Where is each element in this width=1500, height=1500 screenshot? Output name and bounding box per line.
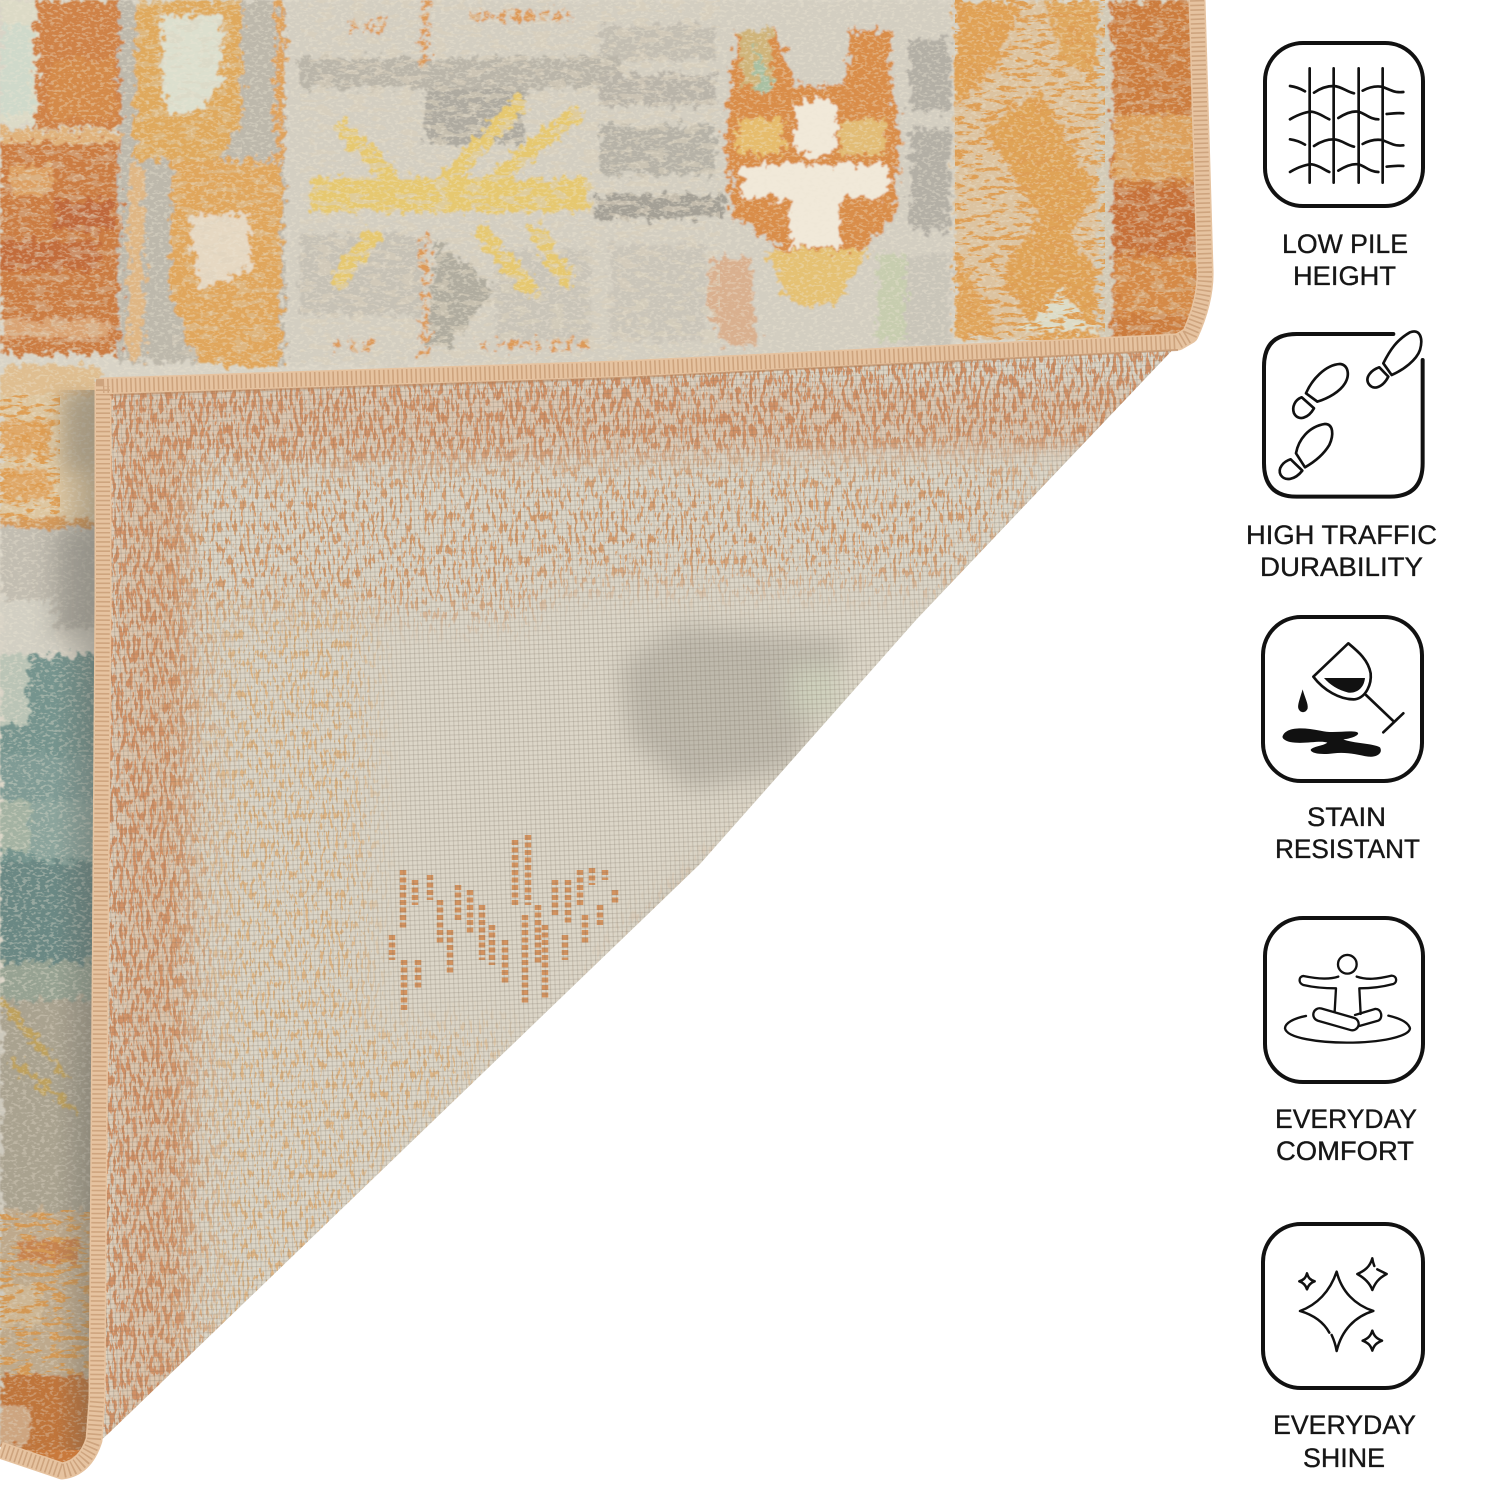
- feature: stain resistant: [1263, 617, 1422, 864]
- label: high traffic durability: [1246, 520, 1437, 582]
- hexagon border panel: [120, 0, 285, 365]
- label: high traffic durability: DURABILITY: [1260, 552, 1423, 582]
- label: everyday shine: SHINE: [1303, 1443, 1385, 1473]
- label: everyday comfort: COMFORT: [1276, 1136, 1414, 1166]
- icon: spilled wine glass: [1263, 617, 1422, 781]
- label: stain resistant: RESISTANT: [1275, 834, 1420, 864]
- icon: footprints: [1264, 331, 1423, 497]
- woven hatch on orange border: [0, 0, 1200, 1375]
- orange back-weave speckle: [102, 351, 1171, 1439]
- central grey field: [288, 0, 953, 365]
- woven colour patches: [110, 385, 1190, 1450]
- feature: high traffic durability: [1246, 331, 1437, 582]
- label: stain resistant: STAIN: [1307, 802, 1386, 832]
- label: low pile height: LOW PILE: [1282, 229, 1408, 259]
- icon: sparkles: [1263, 1224, 1423, 1388]
- label: low pile height: [1282, 229, 1408, 291]
- patterned orange border: [955, 0, 1113, 340]
- feature: everyday comfort: [1265, 918, 1423, 1166]
- label: high traffic durability: HIGH TRAFFIC: [1246, 520, 1437, 550]
- label: everyday shine: EVERYDAY: [1273, 1410, 1416, 1440]
- feature: everyday shine: [1263, 1224, 1423, 1473]
- orange dashed axis: [335, 0, 590, 360]
- right rust border: [1112, 0, 1202, 340]
- lower-left strip of front face: [0, 365, 100, 1475]
- icon: seated person: [1265, 918, 1423, 1082]
- stitched binding along fold and edges: [0, 0, 1205, 1471]
- yellow star motif: [312, 100, 590, 295]
- label: low pile height: HEIGHT: [1293, 261, 1396, 291]
- label: everyday comfort: [1275, 1104, 1417, 1166]
- top-left rust blocks: [0, 0, 122, 354]
- label: everyday shine: [1273, 1410, 1416, 1473]
- rug back face: [102, 350, 1172, 1439]
- feature: low pile height: [1265, 43, 1423, 291]
- orange cross motif: [706, 30, 906, 345]
- label: stain resistant: [1275, 802, 1420, 864]
- icon: carpet pile: [1265, 43, 1423, 206]
- label: everyday comfort: EVERYDAY: [1275, 1104, 1417, 1134]
- orange back motif: [392, 835, 615, 1012]
